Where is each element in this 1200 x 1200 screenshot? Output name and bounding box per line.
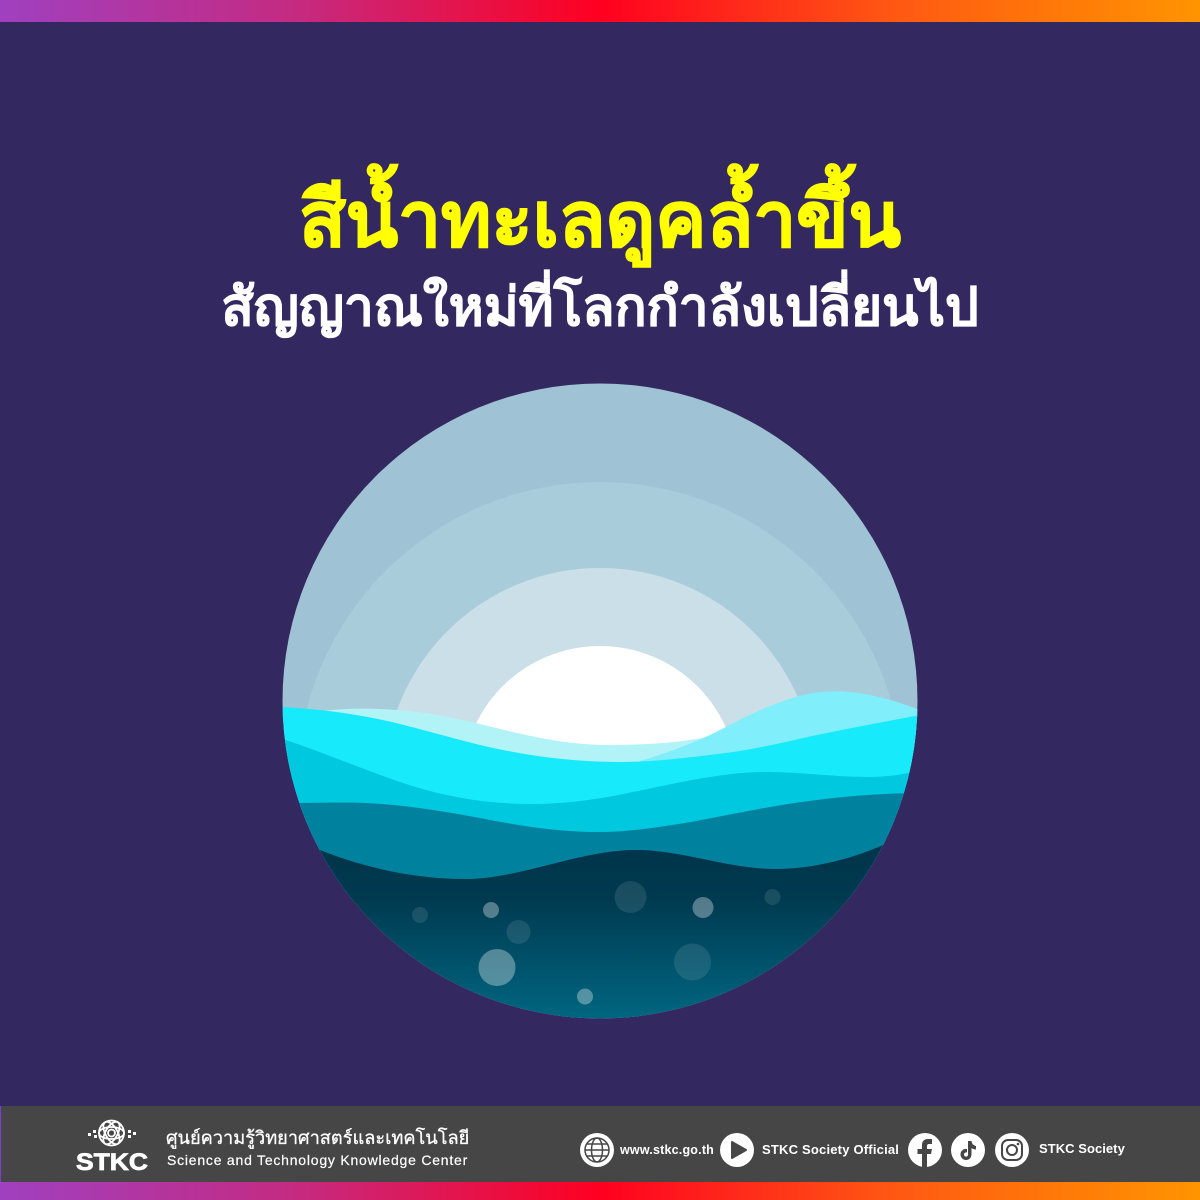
turquoise wave	[280, 738, 920, 900]
sky	[280, 380, 920, 780]
icon: play	[720, 1133, 754, 1167]
youtube text: STKC Society Official	[762, 1142, 899, 1157]
deep water	[320, 845, 883, 1018]
bubbles	[412, 881, 780, 1004]
subtitle: สัญญาณใหม่ที่โลกกำลังเปลี่ยนไป	[221, 278, 979, 337]
teal wave	[290, 793, 910, 900]
bottom gradient bar	[0, 1182, 1200, 1200]
light right wave	[640, 691, 920, 800]
footer band	[0, 1106, 1200, 1182]
icon: instagram	[995, 1133, 1029, 1167]
sun	[476, 646, 726, 745]
center name English: Science and Technology Knowledge Center	[167, 1152, 468, 1168]
cyan wave	[280, 707, 920, 900]
icon: tiktok	[951, 1133, 985, 1167]
center name Thai: ศูนย์ความรู้วิทยาศาสตร์และเทคโนโลยี	[166, 1128, 469, 1148]
logo: STKC	[76, 1120, 148, 1172]
pale back wave	[326, 708, 704, 762]
illustration: sun setting over ocean in a circle	[282, 384, 918, 1018]
website text: www.stkc.go.th	[620, 1143, 714, 1157]
icon: facebook	[908, 1133, 942, 1167]
icon: globe	[580, 1133, 614, 1167]
instagram text: STKC Society	[1039, 1141, 1125, 1156]
top gradient bar	[0, 0, 1200, 22]
title: สีน้ำทะเลดูคล้ำขึ้น	[299, 178, 901, 263]
sun glow rings	[297, 482, 902, 1018]
